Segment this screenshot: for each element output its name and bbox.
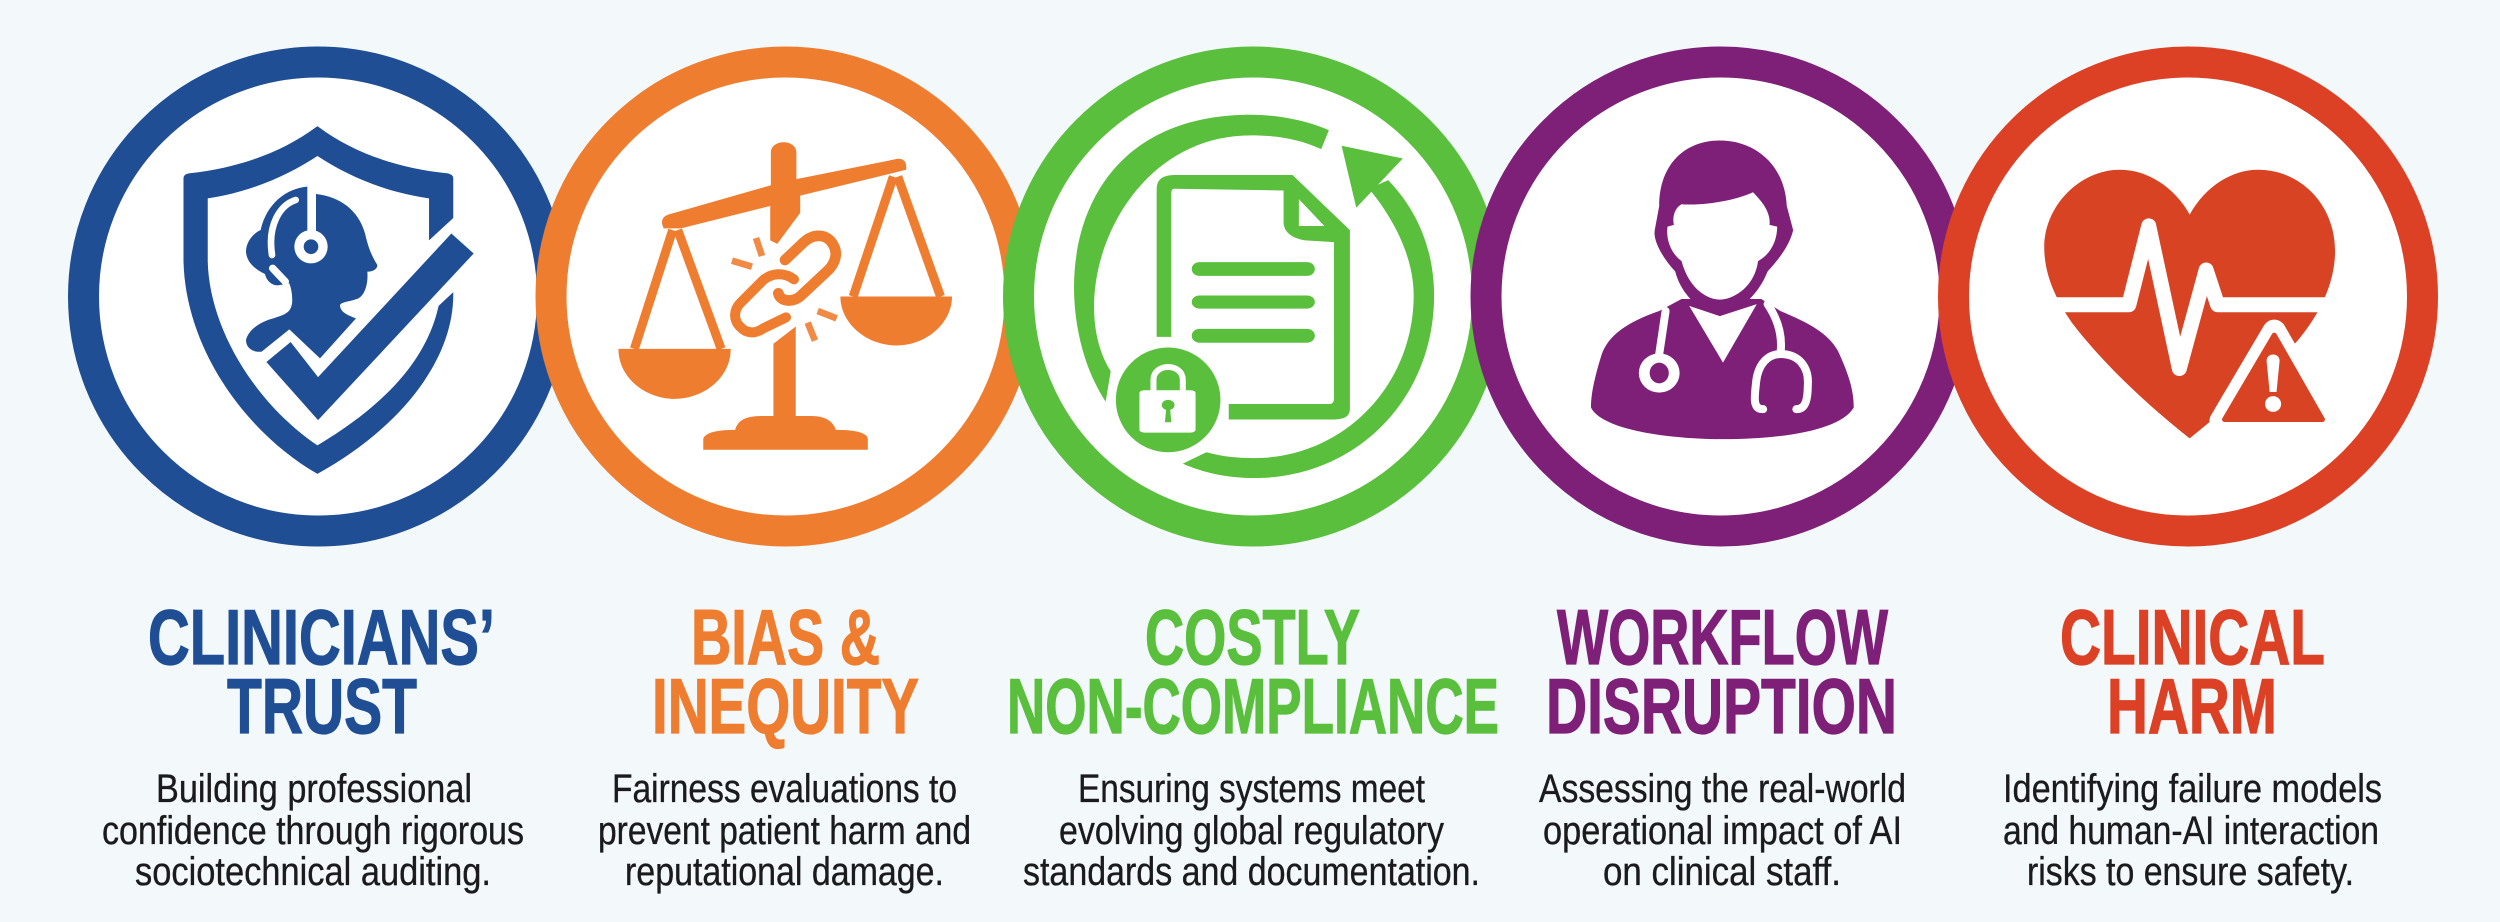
description bbox=[1023, 767, 1480, 894]
description: reputational damage. bbox=[625, 850, 944, 894]
description: Assessing the real-world bbox=[1539, 767, 1906, 811]
description bbox=[2003, 767, 2382, 894]
ring: blue circle bbox=[84, 62, 552, 531]
heading bbox=[148, 593, 495, 750]
heading bbox=[1007, 593, 1499, 750]
panel: clinicians' trust bbox=[84, 62, 552, 894]
ring: purple circle bbox=[1486, 62, 1955, 531]
description bbox=[102, 767, 524, 894]
heading bbox=[2060, 593, 2325, 750]
icon: scales with broken chain link bbox=[618, 142, 952, 450]
heading: WORKFLOW bbox=[1557, 593, 1888, 681]
icon: heart with ECG line and warning triangle bbox=[2044, 170, 2335, 438]
ring: red circle bbox=[1954, 62, 2422, 531]
heading: NON-COMPLIANCE bbox=[1007, 662, 1499, 750]
description: Fairness evaluations to bbox=[612, 767, 957, 811]
heading: CLINICIANS’ bbox=[148, 593, 495, 681]
heading: CLINICAL bbox=[2060, 593, 2325, 681]
panel: workflow disruption bbox=[1486, 62, 1955, 894]
description: standards and documentation. bbox=[1023, 850, 1480, 894]
description: confidence through rigorous bbox=[102, 809, 524, 853]
icon: shield with clinician and check mark bbox=[183, 126, 474, 474]
description: Building professional bbox=[156, 767, 472, 811]
heading bbox=[652, 593, 919, 750]
description: operational impact of AI bbox=[1543, 809, 1902, 853]
description: Identifying failure models bbox=[2003, 767, 2382, 811]
description: on clinical staff. bbox=[1603, 850, 1841, 894]
heading: BIAS & bbox=[691, 593, 880, 681]
heading: INEQUITY bbox=[652, 662, 919, 750]
description: evolving global regulatory bbox=[1059, 809, 1444, 853]
description: risks to ensure safety. bbox=[2027, 850, 2354, 894]
description: prevent patient harm and bbox=[598, 809, 971, 853]
panel: costly non-compliance bbox=[1007, 62, 1499, 894]
panel: bias and inequity bbox=[551, 62, 1020, 894]
description bbox=[1539, 767, 1906, 894]
heading: COSTLY bbox=[1145, 593, 1360, 681]
ring: orange circle bbox=[551, 62, 1020, 531]
heading: HARM bbox=[2107, 662, 2277, 750]
panel: clinical harm bbox=[1954, 62, 2422, 894]
description bbox=[598, 767, 971, 894]
icon: doctor with stethoscope bbox=[1591, 141, 1854, 439]
icon: document with lock and circular arrow bbox=[1074, 115, 1434, 478]
description: and human-AI interaction bbox=[2003, 809, 2379, 853]
heading: DISRUPTION bbox=[1546, 662, 1897, 750]
description: sociotechnical auditing. bbox=[135, 850, 491, 894]
heading: TRUST bbox=[227, 662, 417, 750]
heading bbox=[1546, 593, 1897, 750]
description: Ensuring systems meet bbox=[1078, 767, 1425, 811]
ring: green circle bbox=[1018, 62, 1488, 531]
